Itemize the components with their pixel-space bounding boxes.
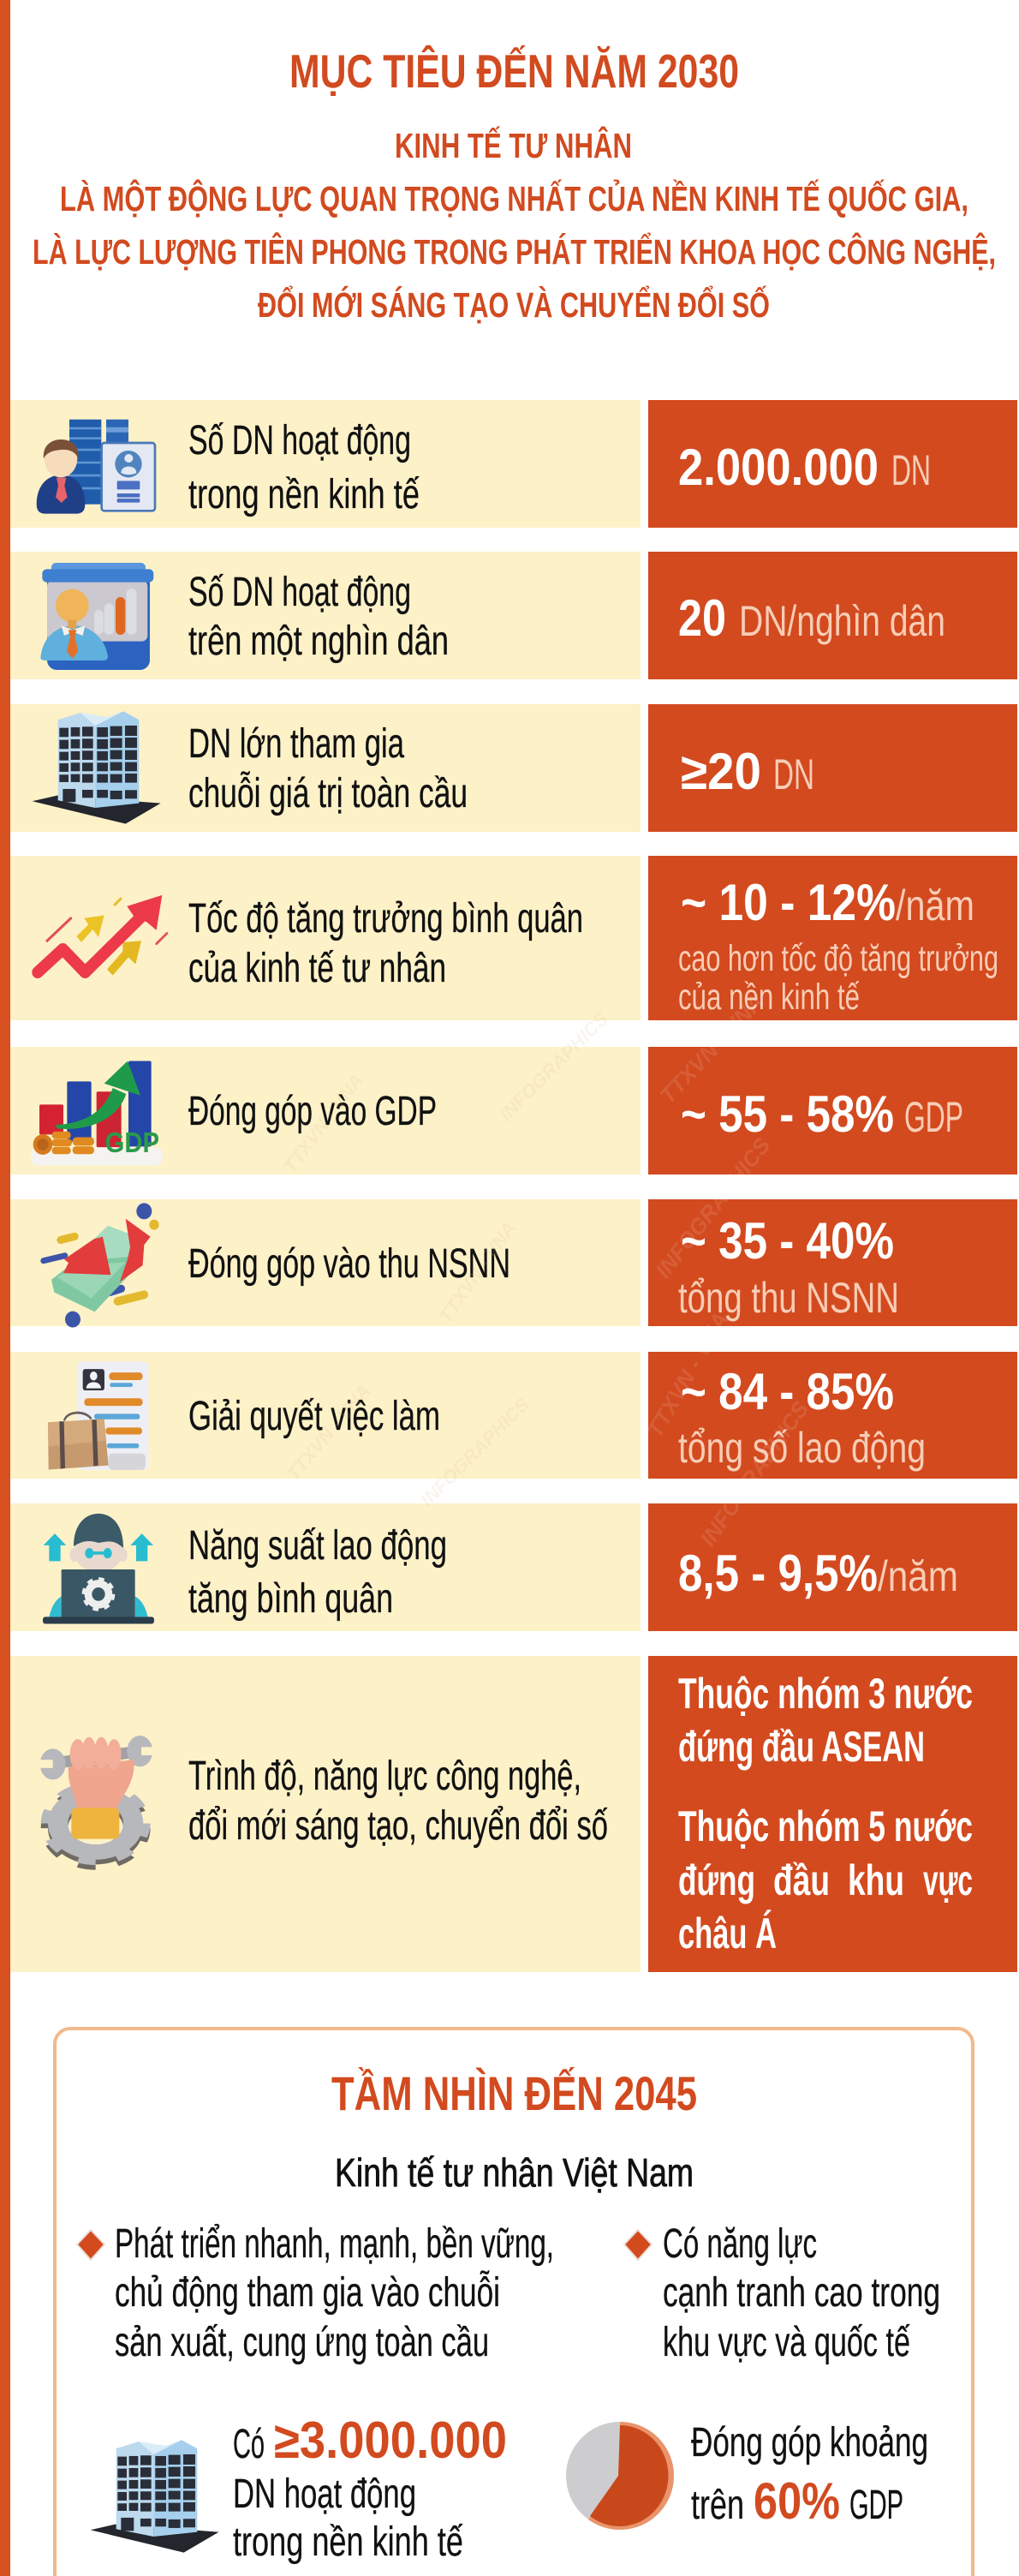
subtitle: KINH TẾ TƯ NHÂN bbox=[395, 126, 632, 165]
value: tổng thu NSNN bbox=[678, 1274, 899, 1322]
row 8: labour productivity bbox=[10, 1503, 1017, 1631]
label: Tốc độ tăng trưởng bình quân bbox=[188, 896, 583, 941]
label: Năng suất lao động bbox=[188, 1523, 447, 1569]
value: DN/nghìn dân bbox=[739, 597, 945, 645]
value bbox=[678, 1670, 973, 1957]
value: của nền kinh tế bbox=[678, 977, 860, 1018]
row 5: GDP contribution bbox=[10, 1047, 1017, 1174]
stat: 3,000,000 enterprises: Có bbox=[233, 2422, 265, 2467]
stat: 3,000,000 enterprises: ≥3.000.000 bbox=[274, 2412, 507, 2469]
label bbox=[188, 570, 449, 664]
label: Trình độ, năng lực công nghệ, bbox=[188, 1754, 581, 1799]
value: /năm bbox=[878, 1552, 958, 1600]
stat: 60% GDP: 60% bbox=[754, 2472, 840, 2530]
value: /năm bbox=[896, 882, 974, 929]
icon: hand holding wrench over gear bbox=[39, 1736, 156, 1867]
value: DN bbox=[891, 446, 931, 494]
value: ≥20 bbox=[681, 743, 761, 800]
value: khu bbox=[848, 1856, 904, 1904]
label bbox=[188, 721, 468, 816]
label: của kinh tế tư nhân bbox=[188, 946, 446, 991]
watermarks: TTXVN - VNA bbox=[654, 989, 769, 1109]
subtitle: ĐỔI MỚI SÁNG TẠO VÀ CHUYỂN ĐỔI SỐ bbox=[258, 284, 770, 325]
label: đổi mới sáng tạo, chuyển đổi số bbox=[188, 1803, 608, 1849]
value: ~ 55 - 58% bbox=[681, 1085, 894, 1143]
watermarks: INFOGRAPHICS bbox=[650, 1133, 776, 1283]
pie chart: 60% bbox=[566, 2422, 674, 2530]
label bbox=[188, 896, 583, 991]
value: 2.000.000 bbox=[678, 439, 879, 496]
value bbox=[678, 589, 945, 647]
value: đầu bbox=[773, 1856, 830, 1904]
icon: worker at laptop bbox=[43, 1514, 154, 1623]
value: ~ 10 - 12% bbox=[681, 874, 896, 931]
watermarks: TTXVN - VNA bbox=[283, 1380, 375, 1485]
watermarks: TTXVN - VNA bbox=[641, 1308, 734, 1442]
row 9: technology level bbox=[10, 1656, 1017, 1972]
watermarks: TTXVN - VNA bbox=[279, 1070, 367, 1177]
subheading: Kinh tế tư nhân Việt Nam bbox=[335, 2150, 694, 2195]
watermarks: INFOGRAPHICS bbox=[694, 1396, 814, 1551]
label bbox=[188, 1523, 447, 1622]
bullet: competitiveness: Có năng lực bbox=[663, 2221, 817, 2267]
label bbox=[188, 418, 420, 517]
value bbox=[678, 874, 998, 1018]
label: Đóng góp vào GDP bbox=[188, 1089, 437, 1134]
value: GDP bbox=[904, 1093, 963, 1141]
value: ~ 35 - 40% bbox=[681, 1212, 894, 1270]
panel: vision 2045 bbox=[55, 2029, 973, 2576]
value: đứng bbox=[678, 1856, 755, 1904]
stat: 3,000,000 enterprises bbox=[233, 2412, 507, 2565]
icon: office building bbox=[33, 711, 161, 824]
value: vực bbox=[923, 1856, 973, 1904]
bullet: growth: sản xuất, cung ứng toàn cầu bbox=[115, 2320, 489, 2365]
watermarks bbox=[279, 989, 814, 1551]
icon: GDP bar chart bbox=[31, 1061, 163, 1166]
stat: 60% GDP bbox=[691, 2420, 928, 2530]
label: trong nền kinh tế bbox=[188, 472, 420, 517]
left accent stripe bbox=[0, 0, 10, 2576]
label: chuỗi giá trị toàn cầu bbox=[188, 770, 468, 816]
watermarks: INFOGRAPHICS bbox=[495, 1007, 612, 1126]
icon: CV and briefcase bbox=[48, 1361, 148, 1470]
row 6: state budget contribution bbox=[10, 1199, 1017, 1328]
label: Đóng góp vào thu NSNN bbox=[188, 1241, 510, 1287]
title: MỤC TIÊU ĐẾN NĂM 2030 bbox=[289, 45, 739, 98]
row 7: job creation bbox=[10, 1352, 1017, 1479]
icon: GDP bar chart: GDP bbox=[105, 1126, 159, 1158]
bullet: growth: chủ động tham gia vào chuỗi bbox=[115, 2269, 500, 2316]
bullet: competitiveness bbox=[624, 2221, 940, 2365]
value bbox=[681, 743, 814, 800]
heading: TẦM NHÌN ĐẾN 2045 bbox=[331, 2066, 697, 2120]
icon: businessman and profile card bbox=[37, 420, 155, 514]
stat: 3,000,000 enterprises: DN hoạt động bbox=[233, 2471, 416, 2517]
bullet: growth: Phát triển nhanh, mạnh, bền vững, bbox=[115, 2221, 554, 2267]
row 1: number of enterprises bbox=[10, 400, 1017, 528]
value: DN bbox=[773, 750, 814, 798]
watermarks: TTXVN - VNA bbox=[435, 1217, 520, 1327]
value: ~ 84 - 85% bbox=[681, 1363, 894, 1420]
value: tổng số lao động bbox=[678, 1424, 926, 1472]
value: châu Á bbox=[678, 1910, 777, 1957]
label bbox=[188, 1754, 608, 1849]
row 3: large enterprises in global value chains bbox=[10, 704, 1017, 832]
row 4: average growth rate bbox=[10, 856, 1017, 1020]
stat: 60% GDP: trên bbox=[691, 2483, 744, 2528]
label: trên một nghìn dân bbox=[188, 619, 449, 664]
label: DN lớn tham gia bbox=[188, 721, 404, 767]
icon: money stack with red arrows bbox=[44, 1203, 159, 1328]
stat: 60% GDP: Đóng góp khoảng bbox=[691, 2420, 928, 2465]
bullet: competitiveness: khu vực và quốc tế bbox=[663, 2320, 910, 2365]
icon: office building bbox=[91, 2440, 219, 2553]
value bbox=[678, 1363, 926, 1472]
label: Giải quyết việc làm bbox=[188, 1394, 440, 1439]
stat: 3,000,000 enterprises: trong nền kinh tế bbox=[233, 2519, 463, 2565]
label: tăng bình quân bbox=[188, 1576, 393, 1622]
stat: 60% GDP: GDP bbox=[849, 2483, 903, 2528]
bullet: growth bbox=[77, 2221, 554, 2365]
icon: rising red arrow bbox=[38, 895, 167, 976]
label: Số DN hoạt động bbox=[188, 570, 411, 615]
subtitle bbox=[33, 126, 996, 325]
value bbox=[678, 1212, 899, 1322]
row 2: enterprises per thousand people bbox=[10, 552, 1017, 679]
icon: presenter with chart bbox=[40, 563, 153, 670]
value: 8,5 - 9,5% bbox=[678, 1545, 878, 1602]
watermarks: INFOGRAPHICS bbox=[416, 1393, 533, 1511]
value: 20 bbox=[678, 589, 726, 647]
label: Số DN hoạt động bbox=[188, 418, 411, 463]
